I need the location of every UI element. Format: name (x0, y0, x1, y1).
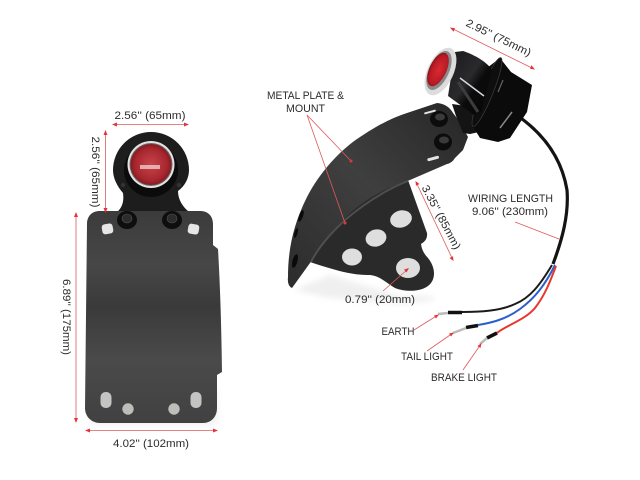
callout: wiring length: WIRING LENGTH (468, 193, 553, 205)
left dimension: plate height (60, 212, 78, 423)
plate fold highlight (311, 181, 408, 262)
left dimension: plate width (85, 428, 218, 450)
top slots (424, 109, 439, 161)
callout: tail light: TAIL LIGHT (401, 351, 453, 363)
left dimension: lamp height (89, 130, 108, 213)
callout: wiring length (468, 193, 559, 239)
curved metal plate top face (288, 103, 468, 288)
right product: side view of bracket and lamp (288, 43, 567, 344)
label: 4.02'' (102mm) (113, 438, 189, 450)
label: 2.95'' (75mm) (464, 17, 533, 59)
label: 6.89'' (175mm) (60, 279, 72, 355)
dimension: flap height (416, 181, 463, 261)
callout: wiring length: 9.06'' (230mm) (472, 206, 548, 218)
left product: bracket plate with tail light (85, 132, 222, 425)
callout: tail light (401, 332, 454, 363)
label: 2.56'' (65mm) (89, 136, 101, 208)
black earth wire (462, 265, 552, 312)
licence plate bracket (85, 211, 222, 423)
red brake light wire (497, 266, 556, 333)
callout: brake light: BRAKE LIGHT (431, 372, 497, 384)
ground shadow (294, 275, 436, 304)
edge slots (291, 210, 305, 268)
lamp rear flange and mount arm (452, 55, 532, 142)
callout: brake light (431, 343, 497, 384)
plate slot holes (100, 223, 202, 415)
callout: earth: EARTH (382, 326, 415, 338)
dimension: lamp depth (450, 17, 535, 70)
mounting disc (113, 132, 189, 212)
callout: metal plate and mount: MOUNT (286, 103, 325, 115)
label: 2.56'' (65mm) (114, 110, 186, 122)
blue tail light wire (478, 265, 555, 325)
body highlight (460, 78, 484, 96)
left dimension: top width (112, 110, 189, 126)
lamp lens (418, 43, 463, 100)
wiring cable (518, 116, 567, 264)
callout: hole diameter (345, 268, 415, 306)
tail light lens (121, 141, 181, 197)
callout: metal plate and mount (267, 90, 352, 224)
callout: earth (382, 314, 439, 338)
flap holes (342, 208, 420, 278)
callout: hole diameter: 0.79'' (20mm) (345, 294, 415, 306)
plate shadow (90, 390, 218, 425)
mount bolts (117, 211, 182, 229)
callout: metal plate and mount: METAL PLATE & (267, 90, 345, 102)
top bolts (430, 111, 452, 150)
lamp body (448, 51, 492, 115)
hanging flap with mounting holes (310, 180, 434, 291)
label: 3.35'' (85mm) (419, 183, 463, 252)
